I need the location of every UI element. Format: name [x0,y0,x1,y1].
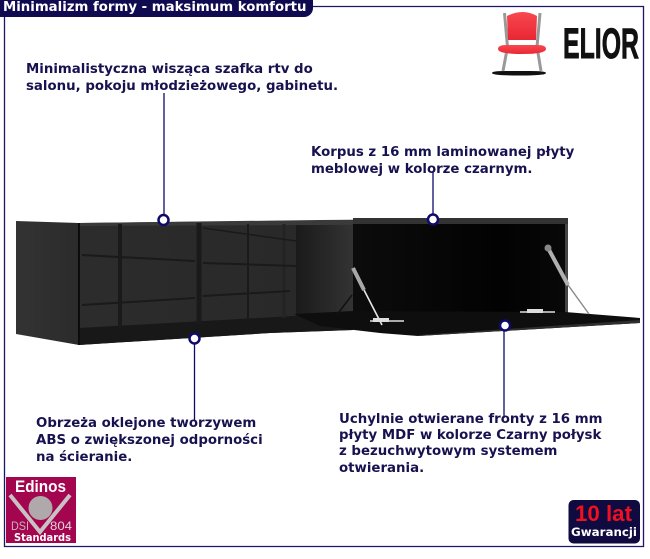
text: body: Korpus z 16 mm laminowanej płyty [311,144,574,160]
text: edges [36,416,263,465]
text: fronts [339,412,602,476]
text: edges: Obrzeża oklejone tworzywem [36,416,256,431]
badge: 10 year warranty: Gwarancji [571,525,637,539]
open flap [294,311,640,336]
badge: 10 year warranty: 10 lat [575,501,633,526]
text: edges: na ścieranie. [36,450,132,465]
badge: Edinos standards: DSI [11,519,29,533]
icon: chair [492,12,546,76]
text: body [311,144,574,176]
hinges [370,320,404,322]
reflections [82,223,296,328]
text: edges: ABS o zwiększonej odporności [36,433,263,448]
text: fronts: płyty MDF w kolorze Czarny połysk [339,428,601,443]
interior [353,224,565,313]
gas struts [353,268,364,290]
badge: Edinos standards: 804 [50,519,72,533]
text: body: meblowej w kolorze czarnym. [311,162,532,176]
badge: Edinos standards: Edinos [15,477,66,496]
text: fronts: Uchylnie otwierane fronty z 16 mm [339,412,602,427]
text: fronts: z bezuchwytowym systemem [339,444,557,459]
text: intro: Minimalistyczna wisząca szafka rtv do [26,62,313,77]
text: fronts: otwierania. [339,461,424,476]
text: intro: salonu, pokoju młodzieżowego, gabinetu. [26,78,338,94]
title: Minimalizm formy - maksimum komfortu [3,0,306,15]
text: intro [26,62,338,94]
cabinet body [16,221,79,345]
badge: Edinos standards: Standards [14,532,71,544]
